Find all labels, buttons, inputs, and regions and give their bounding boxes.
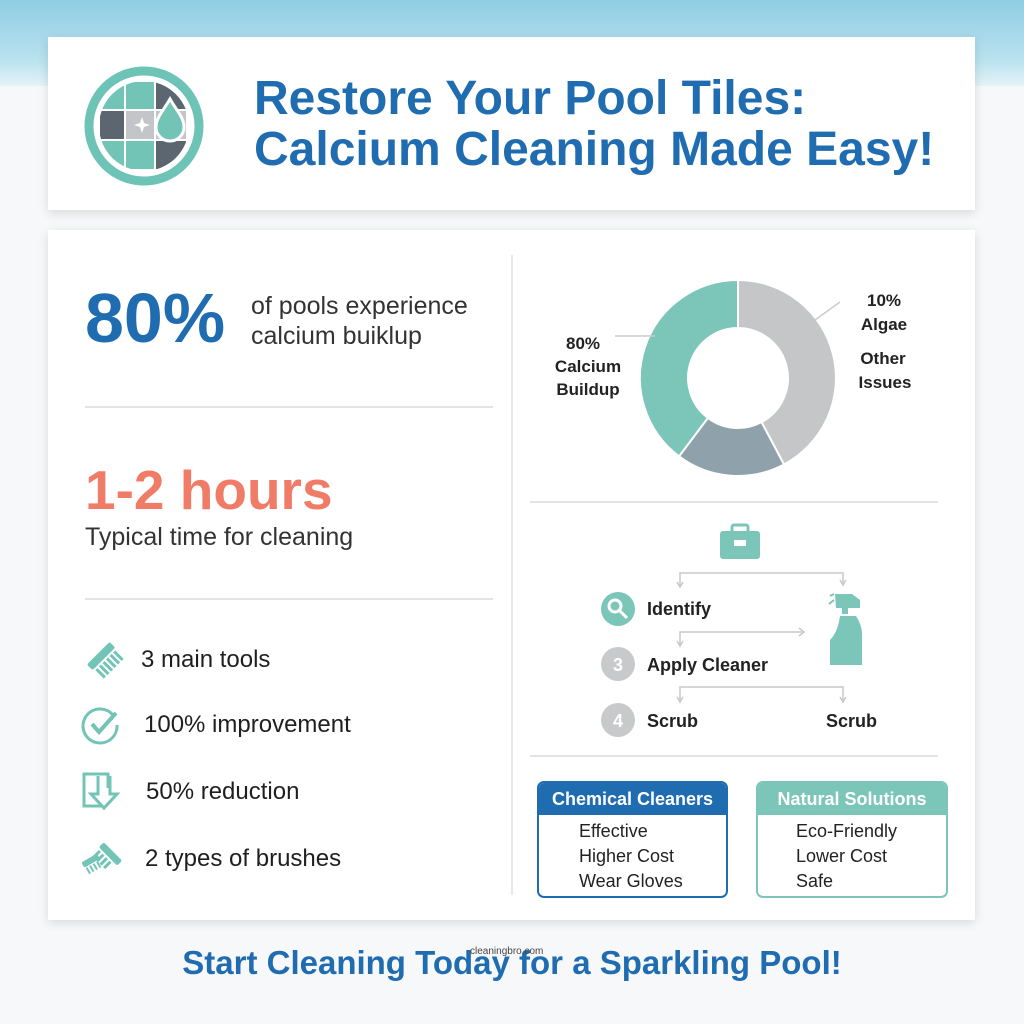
- list: tools stats: 2 types of brushes: [145, 845, 341, 872]
- title: Restore Your Pool Tiles:: [254, 72, 806, 125]
- vertical divider: [511, 255, 513, 895]
- process flow: 4: [613, 711, 623, 731]
- list: tools stats: 3 main tools: [141, 646, 270, 673]
- process flow: 3: [613, 655, 623, 675]
- donut chart: Algae: [861, 315, 907, 334]
- box: chemical cleaners: Higher Cost: [579, 846, 674, 866]
- box: natural solutions: [756, 781, 948, 898]
- icon: check: [82, 708, 118, 744]
- box: chemical cleaners: Effective: [579, 821, 648, 841]
- footer text: Start Cleaning Today for a Sparkling Pool!: [182, 944, 842, 981]
- stat: 80%: of pools experience: [251, 292, 468, 320]
- background water band: [0, 0, 1024, 86]
- header card: [48, 37, 975, 210]
- text: cleaningbro.com: [470, 946, 543, 957]
- box: chemical cleaners: Wear Gloves: [579, 871, 683, 891]
- list: tools stats: 50% reduction: [146, 778, 299, 805]
- icon: tile logo: [84, 66, 204, 186]
- process flow: [601, 524, 877, 737]
- stat: 1-2 hours: Typical time for cleaning: [85, 523, 353, 551]
- donut chart: 80%: [566, 334, 600, 353]
- process flow: Identify: [647, 599, 711, 619]
- stat: 80%: [85, 279, 468, 357]
- donut chart: 10%: [867, 291, 901, 310]
- donut chart: Other: [860, 349, 906, 368]
- donut chart: [555, 281, 911, 475]
- icon: two brushes: [82, 843, 122, 874]
- box: natural solutions: Eco-Friendly: [796, 821, 897, 841]
- list: tools stats: 100% improvement: [144, 711, 351, 738]
- process flow: Scrub: [826, 711, 877, 731]
- donut chart: Calcium: [555, 357, 621, 376]
- box: chemical cleaners: Chemical Cleaners: [552, 789, 713, 809]
- box: natural solutions: Lower Cost: [796, 846, 887, 866]
- donut chart: Buildup: [556, 380, 620, 399]
- main card: [48, 230, 975, 920]
- stat: 1-2 hours: [85, 459, 353, 551]
- process flow: Apply Cleaner: [647, 655, 768, 675]
- process flow: Scrub: [647, 711, 698, 731]
- stat: 80%: calcium buiklup: [251, 322, 422, 350]
- icon: down arrow box: [82, 772, 120, 810]
- donut chart: Issues: [859, 373, 911, 392]
- list: tools stats: [82, 642, 351, 874]
- stat: 80%: 80%: [85, 279, 225, 357]
- box: natural solutions: Natural Solutions: [777, 789, 926, 809]
- icon: brush: [88, 642, 124, 679]
- box: natural solutions: Safe: [796, 871, 833, 891]
- stat: 1-2 hours: 1-2 hours: [85, 459, 333, 521]
- title: [254, 72, 934, 176]
- box: chemical cleaners: [537, 781, 728, 898]
- title: Calcium Cleaning Made Easy!: [254, 123, 934, 176]
